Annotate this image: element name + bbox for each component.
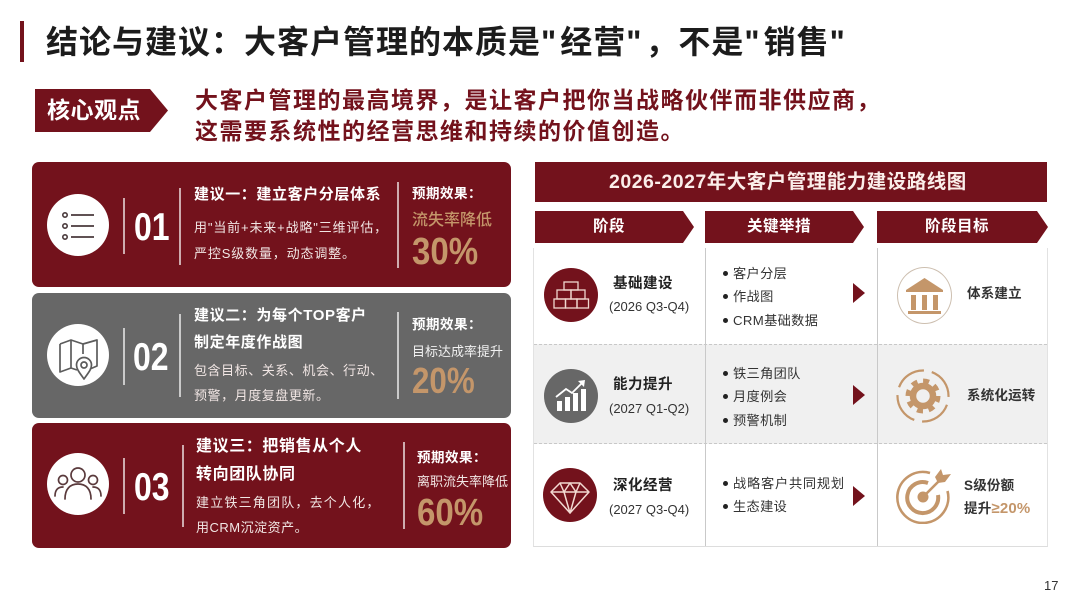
recommendation 2 description: 包含目标、关系、机会、行动、 [194,363,384,378]
effect metric 1: 流失率降低 [412,212,492,229]
panel: recommendation 3 [32,423,511,548]
recommendation 1 description: 用"当前+未来+战略"三维评估， [194,220,388,235]
stage 1 actions: CRM基础数据 [733,313,818,328]
roadmap title banner [535,162,1047,202]
effect value 20%: 20% [412,360,475,401]
stage 1 actions [723,266,818,328]
number 02: 02 [133,336,169,379]
core view statement: 大客户管理的最高境界，是让客户把你当战略伙伴而非供应商， [195,87,881,113]
expected effect 2: 预期效果： [412,317,482,332]
stage 2 actions: 预警机制 [733,413,787,428]
column header: stage goal [877,211,1048,243]
arrow: stage 1 to goal [853,283,865,303]
recommendation 1 description: 严控S级数量，动态调整。 [194,246,356,261]
recommendation 3 description [196,495,381,535]
effect value 30%: 30% [412,231,478,273]
recommendation 3 heading: 建议三：把销售从个人 [196,438,362,455]
recommendation 2 description [194,363,384,403]
stage 1 name: (2026 Q3-Q4) [609,299,689,314]
core view statement: 这需要系统性的经营思维和持续的价值创造。 [195,118,685,144]
effect value 60%: 60% [417,492,483,534]
recommendation 2 heading [194,307,367,351]
stage 3 actions: 生态建设 [733,499,787,514]
effect metric 3: 离职流失率降低 [417,474,508,489]
effect metric 2: 目标达成率提升 [412,344,503,359]
number 01: 01 [134,206,170,249]
title accent bar [20,21,24,62]
recommendation 1 heading: 建议一：建立客户分层体系 [194,186,381,203]
panel: recommendation 2 [32,293,511,418]
core view tag [35,89,168,132]
recommendation 1 description [194,220,388,261]
expected effect 1: 预期效果： [412,186,482,201]
icon: gear [896,369,950,423]
icon: list [47,194,109,256]
stage 3 actions: 战略客户共同规划 [733,476,845,491]
page number: 17 [1044,578,1058,593]
recommendation 3 description: 建立铁三角团队，去个人化， [196,495,381,510]
icon: growth chart [544,369,598,423]
arrow: stage 3 to goal [853,486,865,506]
stage 3 name: (2027 Q3-Q4) [609,502,689,517]
stage 3 actions [723,476,845,514]
expected effect 3: 预期效果： [417,450,487,465]
column header: stage: 阶段 [593,218,625,235]
recommendation 2 heading: 制定年度作战图 [194,334,303,351]
recommendation 3 heading [196,437,362,483]
title: 结论与建议：大客户管理的本质是"经营"，不是"销售" [46,24,849,60]
roadmap table [533,248,1048,547]
icon: diamond [543,468,597,522]
stage 2 actions: 月度例会 [733,389,787,404]
stage 1 actions: 客户分层 [733,266,787,281]
goal 3: S级份额 [964,478,1014,493]
number 03: 03 [134,466,170,509]
stage 2 name: (2027 Q1-Q2) [609,401,689,416]
stage 2 actions [723,366,801,428]
column header: stage goal: 阶段目标 [925,218,989,235]
goal 1: 体系建立 [967,286,1022,301]
column header: key actions: 关键举措 [747,218,811,235]
goal 3 [964,478,1030,517]
row 2 background [534,344,1047,444]
recommendation 2 description: 预警，月度复盘更新。 [194,388,330,403]
recommendation 3 description: 用CRM沉淀资产。 [196,520,308,535]
stage 1 name [609,275,689,314]
arrow: stage 2 to goal [853,385,865,405]
stage 2 actions: 铁三角团队 [733,366,801,381]
icon: team [47,453,109,515]
panel: recommendation 1 [32,162,511,287]
icon: target [896,469,951,524]
column header: stage [535,211,694,243]
core view tag: 核心观点 [47,97,141,123]
recommendation 3 heading: 转向团队协同 [196,466,296,483]
stage 3 name [609,477,689,517]
goal 3: 提升≥20% [964,500,1030,517]
roadmap title banner: 2026-2027年大客户管理能力建设路线图 [609,171,967,193]
stage 2 name [609,376,689,416]
stage 2 name: 能力提升 [613,377,673,393]
stage 3 name: 深化经营 [613,478,673,494]
recommendation 2 heading: 建议二：为每个TOP客户 [194,307,367,324]
goal 2: 系统化运转 [967,388,1036,403]
stage 1 actions: 作战图 [733,289,774,304]
core view statement [195,87,881,144]
icon: map with pin [47,324,109,386]
icon: bricks [544,268,598,322]
column header: key actions [705,211,864,243]
icon: institution [897,267,952,324]
stage 1 name: 基础建设 [613,276,673,292]
